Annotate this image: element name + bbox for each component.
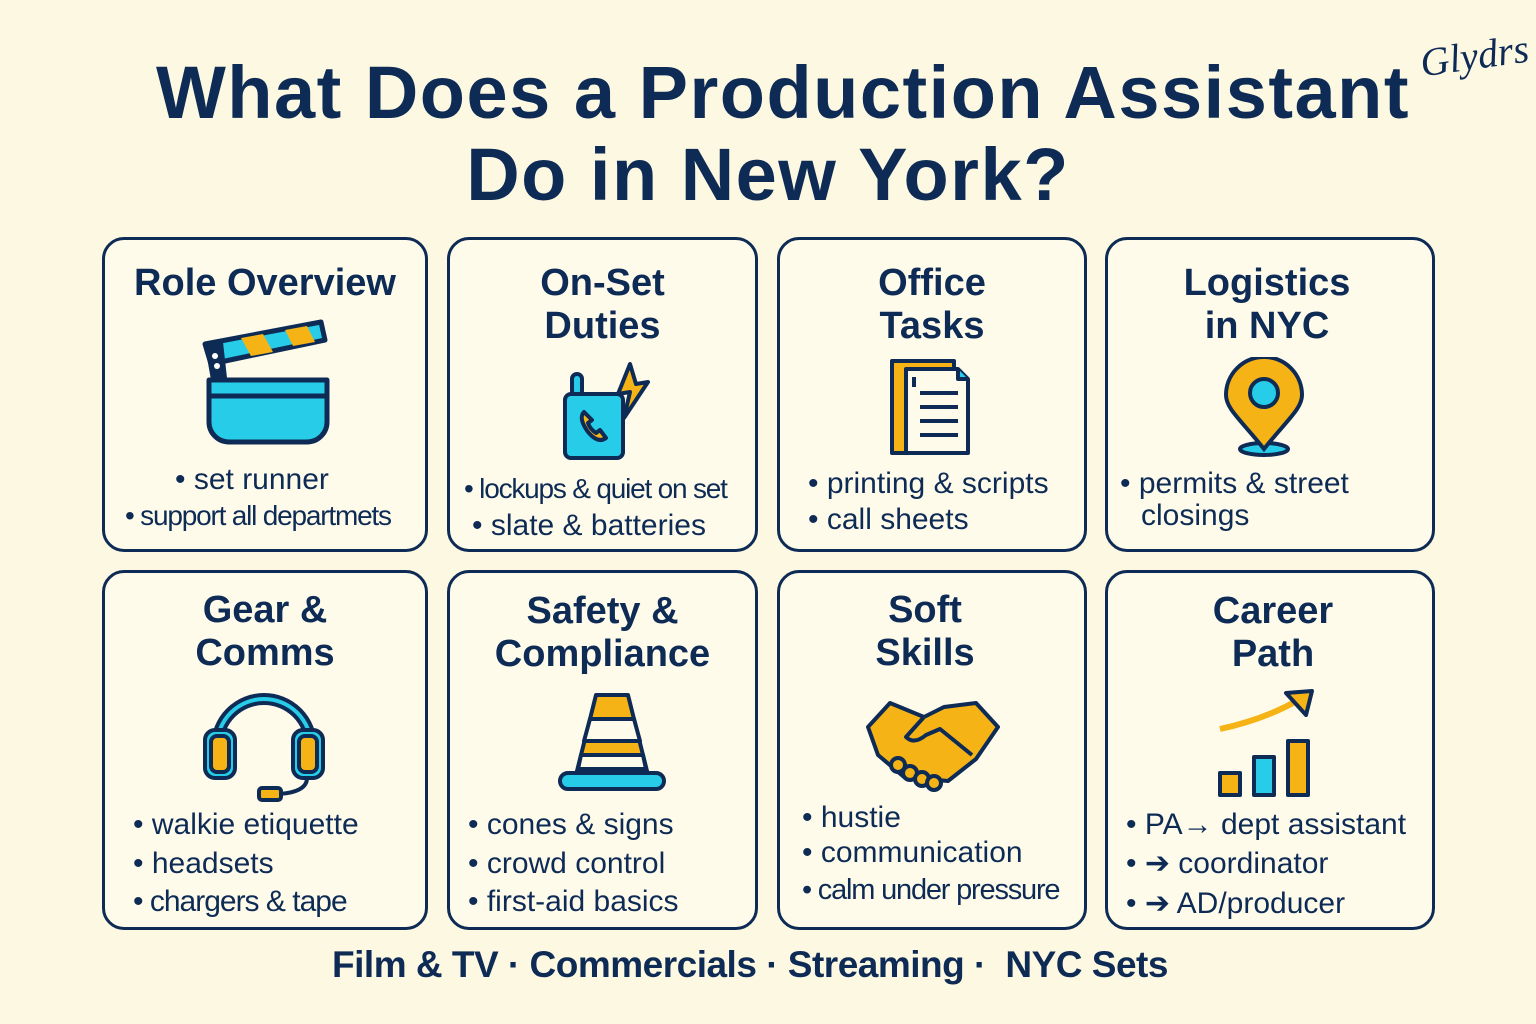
heading: Role Overview [134, 262, 396, 304]
heading: Logistics [1184, 262, 1350, 304]
bullets: • hustie [802, 801, 901, 834]
heading: Compliance [495, 633, 710, 675]
panel: on-set duties [447, 237, 758, 552]
heading [1213, 590, 1333, 675]
panel: logistics: closings [1141, 499, 1249, 532]
heading: On-Set [540, 262, 665, 304]
heading [1184, 262, 1350, 347]
heading: Tasks [880, 305, 984, 347]
heading [878, 262, 986, 347]
icon: map pin [1224, 357, 1304, 457]
bullets: • lockups & quiet on set [464, 473, 727, 504]
heading: Path [1232, 633, 1314, 675]
heading: Gear & [203, 589, 327, 631]
panel: safety [447, 570, 758, 930]
bullets: • PA→ dept assistant [1126, 808, 1406, 841]
panel: safety: • crowd control [468, 847, 665, 880]
bullets: • permits & street [1120, 467, 1349, 500]
panel: office tasks [777, 237, 1087, 552]
icon: headset [203, 693, 325, 802]
icon: handshake [866, 701, 1000, 792]
bullets: • walkie etiquette [133, 808, 359, 841]
icon: growth chart [1218, 689, 1314, 797]
panel: career path: • ➔ coordinator [1126, 847, 1328, 880]
panel: gear & comms [102, 570, 428, 930]
title: Do in New York? [466, 133, 1070, 216]
panel: gear & comms: • chargers & tape [133, 885, 347, 918]
heading [495, 590, 710, 675]
heading: Skills [875, 632, 975, 674]
icon: clapperboard [202, 320, 330, 444]
bullets: • printing & scripts [808, 467, 1049, 500]
heading: in NYC [1205, 305, 1329, 347]
panel: safety: • first-aid basics [468, 885, 679, 918]
panel: career path [1105, 570, 1435, 930]
panel: career path: • ➔ AD/producer [1126, 887, 1345, 920]
bullets: • set runner [175, 463, 329, 496]
heading: Duties [544, 305, 661, 347]
panel: office tasks: • call sheets [808, 503, 969, 536]
heading: Office [878, 262, 986, 304]
icon: traffic cone [558, 693, 666, 791]
panel: logistics [1105, 237, 1435, 552]
panel: soft skills: • communication [802, 836, 1023, 869]
logo: Glydrs [1417, 26, 1531, 85]
panel: role overview [102, 237, 428, 552]
heading [195, 589, 335, 674]
panel: on-set duties: • slate & batteries [472, 509, 706, 542]
icon: document [890, 359, 970, 455]
bullets: • cones & signs [468, 808, 674, 841]
icon: walkie [563, 362, 650, 460]
panel: role overview: • support all departmets [125, 500, 391, 531]
heading: Soft [888, 589, 962, 631]
heading [875, 589, 975, 674]
title: What Does a Production Assistant [156, 51, 1410, 134]
heading: Comms [195, 632, 335, 674]
heading: Career [1213, 590, 1333, 632]
heading: Safety & [526, 590, 679, 632]
panel: soft skills [777, 570, 1087, 930]
heading [540, 262, 665, 347]
panel: soft skills: • calm under pressure [802, 874, 1059, 906]
title [156, 51, 1410, 216]
footer: Film & TV · Commercials · Streaming · NYC Sets [332, 944, 1168, 985]
panel: gear & comms: • headsets [133, 847, 274, 880]
